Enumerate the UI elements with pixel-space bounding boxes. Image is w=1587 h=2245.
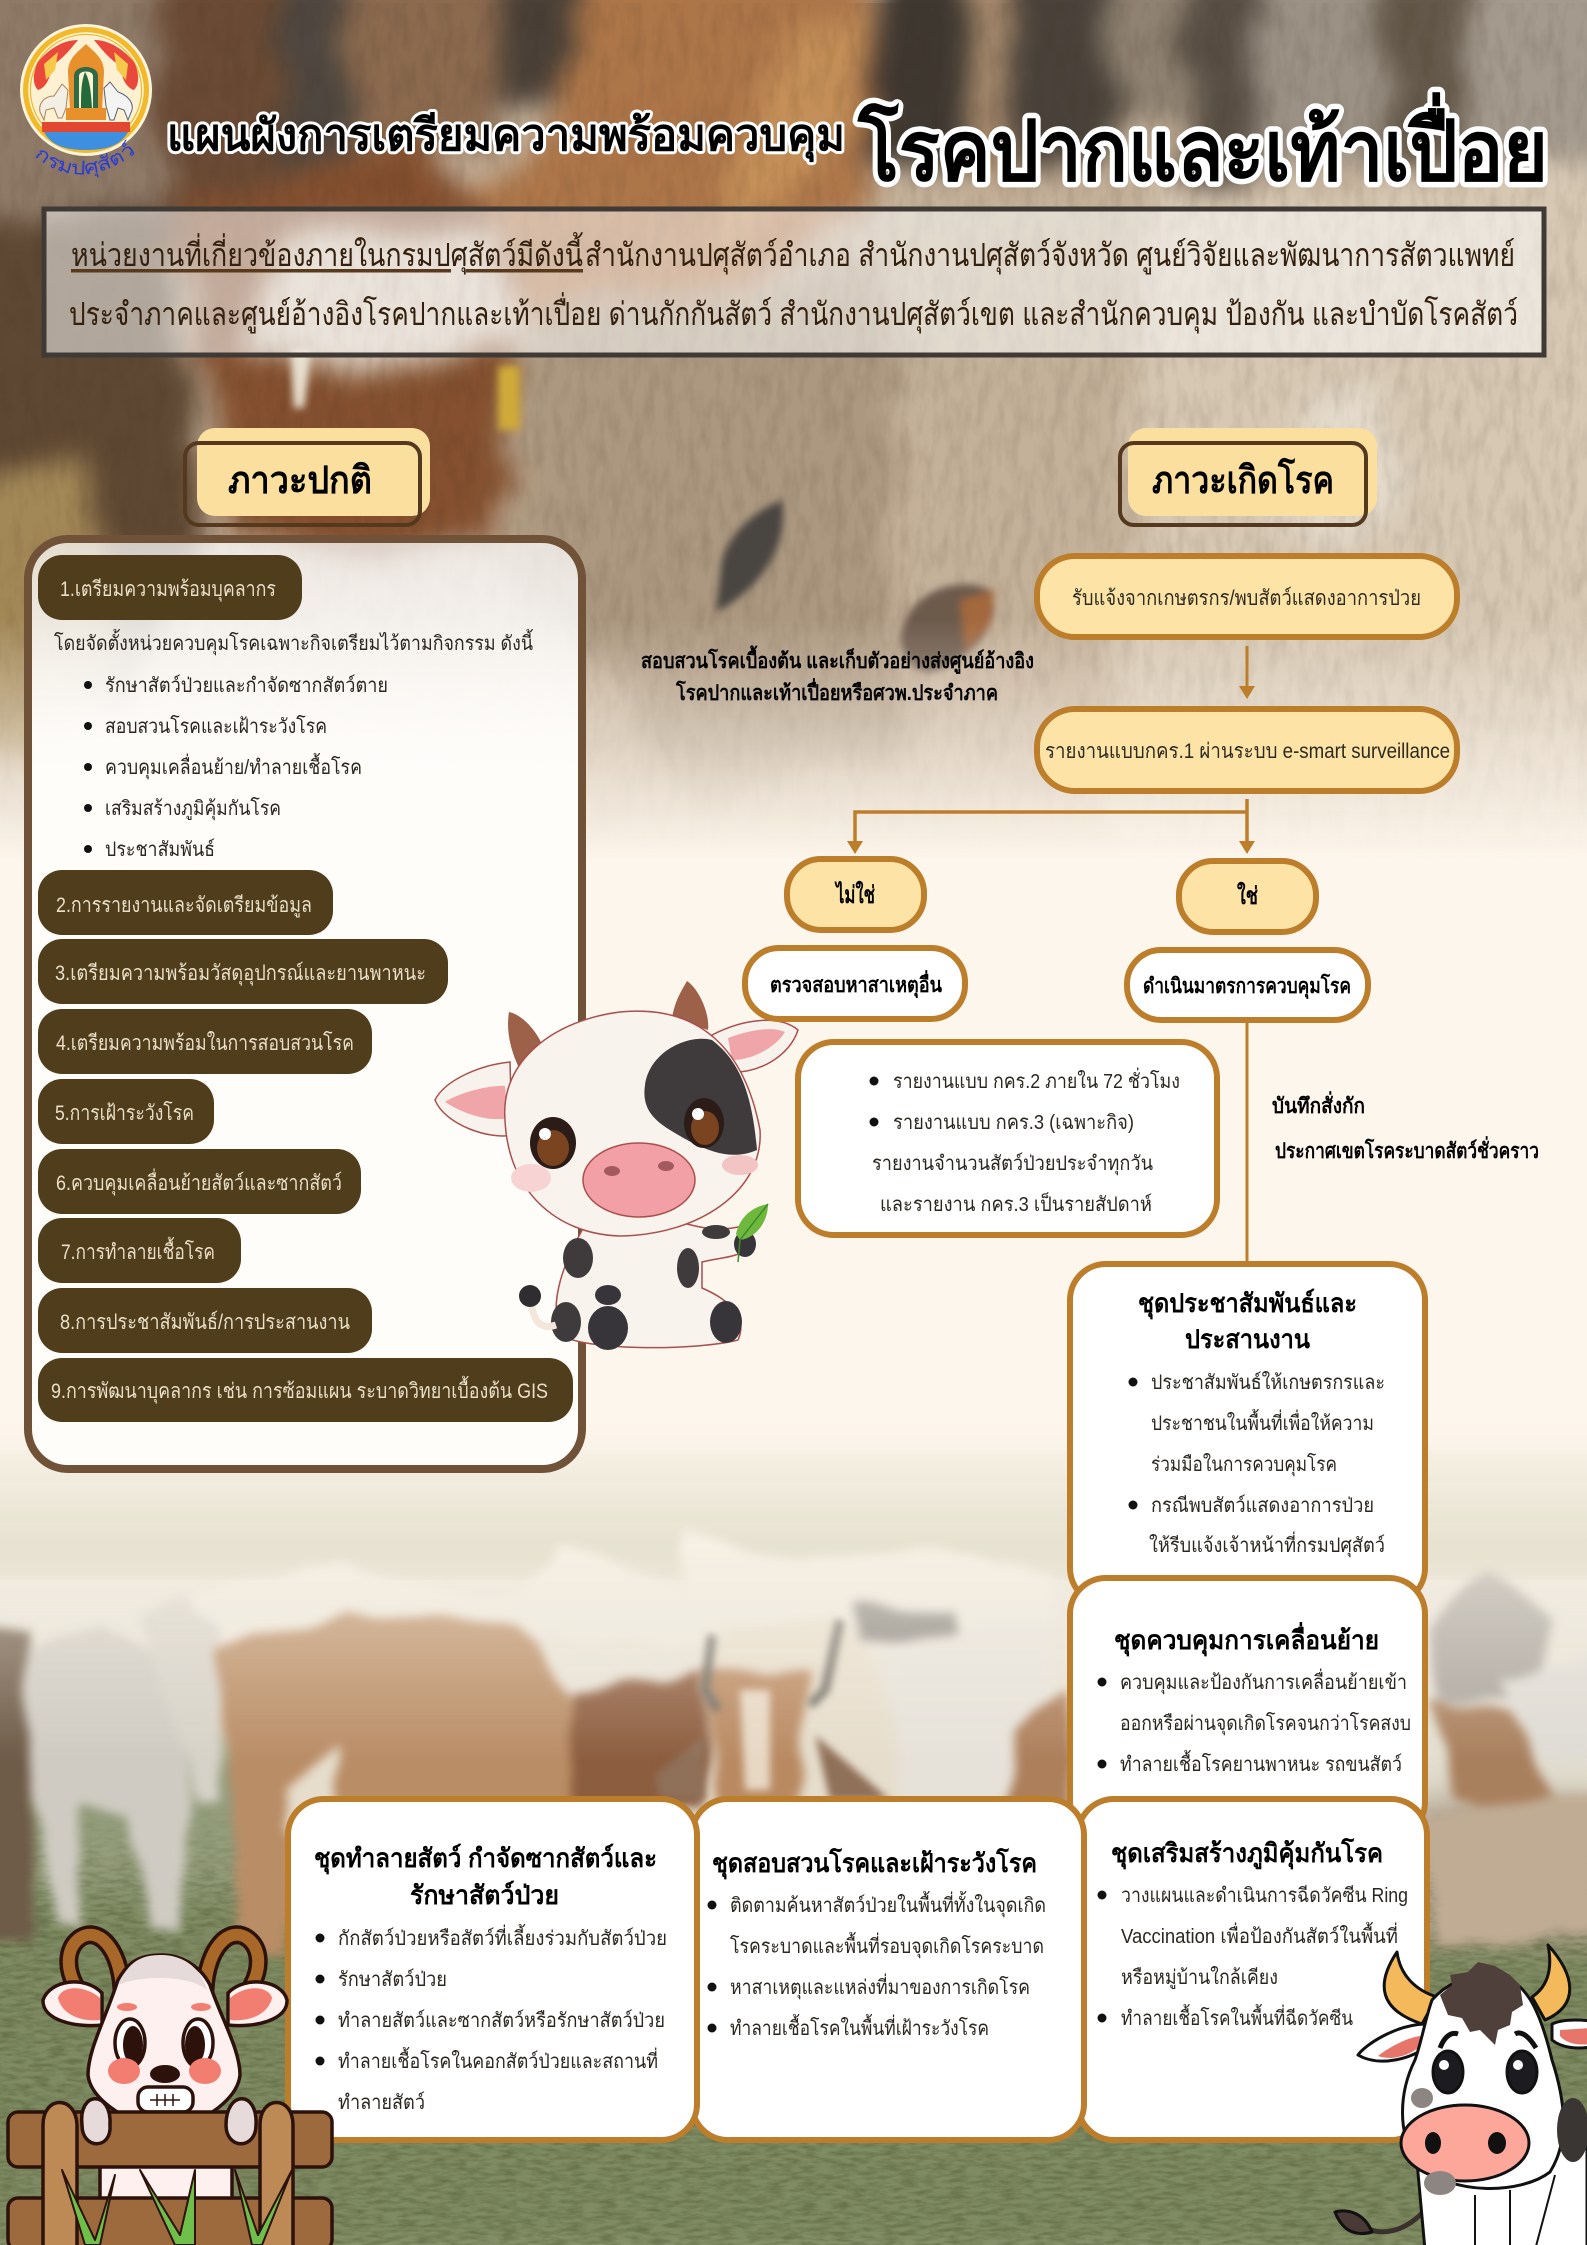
item 6: 6.ควบคุมเคลื่อนย้ายสัตว์และซากสัตว์ xyxy=(56,1168,342,1196)
item 2 xyxy=(38,870,333,935)
flow: e-smart surveillance report box: รายงานแบบกคร.1 ผ่านระบบ e-smart surveillance xyxy=(1045,740,1450,763)
flow: implement control measures: ดำเนินมาตรการควบคุมโรค xyxy=(1143,973,1351,1000)
icon: cartoon cow lower right xyxy=(1335,1945,1587,2245)
text: preliminary investigation note: โรคปากและเท้าเปื่อยหรือศวพ.ประจำภาค xyxy=(675,677,998,705)
panel: investigation and surveillance team: ชุดสอบสวนโรคและเฝ้าระวังโรค xyxy=(712,1847,1037,1880)
item 8: 8.การประชาสัมพันธ์/การประสานงาน xyxy=(60,1310,350,1334)
panel: reporting forms: และรายงาน กคร.3 เป็นรายสัปดาห์ xyxy=(880,1191,1152,1216)
item 1 description: ประชาสัมพันธ์ xyxy=(105,838,215,861)
flow: check other causes: ตรวจสอบหาสาเหตุอื่น xyxy=(770,969,943,999)
panel: immunisation team: วางแผนและดำเนินการฉีดวัคซีน Ring xyxy=(1121,1885,1408,1907)
panel: destruction and treatment team: ทำลายเชื้อโรคในคอกสัตว์ป่วยและสถานที่ xyxy=(338,2047,658,2073)
item 3: 3.เตรียมความพร้อมวัสดุอุปกรณ์และยานพาหนะ xyxy=(55,961,426,986)
heading: outbreak situation xyxy=(1120,428,1377,525)
panel: public relations team: ประสานงาน xyxy=(1185,1324,1310,1354)
title: แผนผังการเตรียมความพร้อมควบคุม xyxy=(167,111,845,163)
panel: reporting forms: รายงานจำนวนสัตว์ป่วยประจำทุกวัน xyxy=(872,1152,1153,1176)
panel: responsible agencies: หน่วยงานที่เกี่ยวข้องภายในกรมปศุสัตว์มีดังนี้ xyxy=(71,232,584,275)
item 4: 4.เตรียมความพร้อมในการสอบสวนโรค xyxy=(56,1031,354,1055)
item 2: 2.การรายงานและจัดเตรียมข้อมูล xyxy=(56,894,312,918)
heading: outbreak situation: ภาวะเกิดโรค xyxy=(1152,457,1334,502)
item 7 xyxy=(38,1218,241,1283)
item 1 xyxy=(38,555,302,620)
panel: public relations team: ประชาชนในพื้นที่เพื่อให้ความ xyxy=(1151,1409,1374,1435)
item 3 xyxy=(38,939,448,1004)
panel: destruction and treatment team: รักษาสัตว์ป่วย xyxy=(410,1880,559,1910)
panel: movement control team xyxy=(1070,1578,1425,1838)
icon: goat behind wooden fence xyxy=(8,1935,332,2245)
panel: immunisation team: Vaccination เพื่อป้องกันสัตว์ในพื้นที่ xyxy=(1121,1922,1398,1948)
panel: immunisation team: ทำลายเชื้อโรคในพื้นที่ฉีดวัคซีน xyxy=(1121,2004,1353,2030)
flow: e-smart surveillance report box xyxy=(1037,709,1457,791)
text: quarantine order note: บันทึกสั่งกัก xyxy=(1272,1090,1365,1118)
panel: destruction and treatment team: กักสัตว์ป่วยหรือสัตว์ที่เลี้ยงร่วมกับสัตว์ป่วย xyxy=(338,1924,667,1950)
arrow: branch to no and yes xyxy=(847,799,1255,854)
panel: destruction and treatment team: ทำลายสัตว์และซากสัตว์หรือรักษาสัตว์ป่วย xyxy=(338,2009,665,2032)
flow: no: ไม่ใช่ xyxy=(834,880,875,909)
flow: first notification box xyxy=(1037,556,1457,637)
icon: cute calf holding leaf xyxy=(435,981,798,1350)
panel: investigation and surveillance team xyxy=(692,1799,1084,2140)
item 1 description: สอบสวนโรคและเฝ้าระวังโรค xyxy=(105,715,327,738)
flow: check other causes xyxy=(745,948,965,1019)
text: quarantine order note xyxy=(1272,1090,1539,1163)
item 1 description: ควบคุมเคลื่อนย้าย/ทำลายเชื้อโรค xyxy=(105,753,362,780)
panel: movement control team: ทำลายเชื้อโรคยานพาหนะ รถขนสัตว์ xyxy=(1120,1750,1402,1776)
panel: normal-situation preparedness list xyxy=(28,539,582,1469)
item 5: 5.การเฝ้าระวังโรค xyxy=(55,1101,194,1125)
item 8 xyxy=(38,1288,372,1353)
panel: reporting forms: รายงานแบบ กคร.2 ภายใน 72 ชั่วโมง xyxy=(893,1067,1180,1093)
title xyxy=(167,92,1548,198)
panel: investigation and surveillance team: ทำลายเชื้อโรคในพื้นที่เฝ้าระวังโรค xyxy=(730,2014,989,2040)
panel: investigation and surveillance team: ติดตามค้นหาสัตว์ป่วยในพื้นที่ทั้งในจุดเกิด xyxy=(730,1891,1046,1918)
item 5 xyxy=(38,1079,214,1144)
item 1 description: เสริมสร้างภูมิคุ้มกันโรค xyxy=(105,797,281,821)
logo: department of livestock development seal xyxy=(20,24,152,178)
panel: public relations team: ร่วมมือในการควบคุมโรค xyxy=(1151,1453,1337,1477)
panel: reporting forms: รายงานแบบ กคร.3 (เฉพาะกิจ) xyxy=(893,1112,1134,1134)
item 9 xyxy=(38,1358,573,1422)
arrow: notification to report xyxy=(1239,646,1255,699)
flow: yes xyxy=(1179,861,1316,932)
panel: public relations team: ให้รีบแจ้งเจ้าหน้าที่กรมปศุสัตว์ xyxy=(1149,1531,1385,1558)
panel: responsible agencies xyxy=(44,209,1544,355)
item 9: 9.การพัฒนาบุคลากร เช่น การซ้อมแผน ระบาดวิทยาเบื้องต้น GIS xyxy=(51,1376,548,1404)
panel: destruction and treatment team: ทำลายสัตว์ xyxy=(338,2091,425,2114)
item 7: 7.การทำลายเชื้อโรค xyxy=(61,1237,215,1264)
panel: public relations team xyxy=(1070,1264,1425,1604)
heading: normal situation: ภาวะปกติ xyxy=(228,460,372,502)
heading: normal situation xyxy=(185,428,430,525)
panel: movement control team: ออกหรือผ่านจุดเกิดโรคจนกว่าโรคสงบ xyxy=(1120,1712,1411,1736)
connector: control measures to teams xyxy=(1246,1023,1248,1265)
text: preliminary investigation note: สอบสวนโรคเบื้องต้น และเก็บตัวอย่างส่งศูนย์อ้างอิง xyxy=(641,645,1034,675)
panel: reporting forms xyxy=(798,1042,1217,1235)
panel: investigation and surveillance team: หาสาเหตุและแหล่งที่มาของการเกิดโรค xyxy=(730,1973,1030,2000)
panel: immunisation team xyxy=(1078,1799,1427,2140)
item 4 xyxy=(38,1009,372,1074)
panel: movement control team: ควบคุมและป้องกันการเคลื่อนย้ายเข้า xyxy=(1120,1668,1407,1695)
panel: immunisation team: ชุดเสริมสร้างภูมิคุ้มกันโรค xyxy=(1111,1837,1383,1870)
item 1: 1.เตรียมความพร้อมบุคลากร xyxy=(60,578,276,602)
panel: immunisation team: หรือหมู่บ้านใกล้เคียง xyxy=(1121,1966,1278,1990)
flow: no xyxy=(787,859,924,930)
panel: public relations team: ประชาสัมพันธ์ให้เกษตรกรและ xyxy=(1151,1371,1385,1394)
flow: yes: ใช่ xyxy=(1237,881,1258,910)
panel: destruction and treatment team: ชุดทำลายสัตว์ กำจัดซากสัตว์และ xyxy=(314,1843,657,1875)
panel: destruction and treatment team xyxy=(288,1799,697,2140)
item 1 description: รักษาสัตว์ป่วยและกำจัดซากสัตว์ตาย xyxy=(105,674,388,697)
item 6 xyxy=(38,1149,361,1214)
flow: implement control measures xyxy=(1127,950,1368,1020)
logo caption: กรมปศุสัตว์ xyxy=(36,139,134,178)
text: preliminary investigation note xyxy=(641,645,1034,705)
panel: public relations team: กรณีพบสัตว์แสดงอาการป่วย xyxy=(1151,1494,1374,1517)
item 1 description xyxy=(54,629,533,861)
panel: movement control team: ชุดควบคุมการเคลื่อนย้าย xyxy=(1114,1621,1379,1657)
panel: investigation and surveillance team: โรคระบาดและพื้นที่รอบจุดเกิดโรคระบาด xyxy=(730,1932,1044,1959)
flow: first notification box: รับแจ้งจากเกษตรกร/พบสัตว์แสดงอาการป่วย xyxy=(1072,586,1421,610)
panel: public relations team: ชุดประชาสัมพันธ์และ xyxy=(1138,1288,1357,1320)
text: quarantine order note: ประกาศเขตโรคระบาดสัตว์ชั่วคราว xyxy=(1275,1135,1539,1163)
item 1 description: โดยจัดตั้งหน่วยควบคุมโรคเฉพาะกิจเตรียมไว้ตามกิจกรรม ดังนี้ xyxy=(54,629,533,656)
panel: destruction and treatment team: รักษาสัตว์ป่วย xyxy=(338,1968,447,1991)
